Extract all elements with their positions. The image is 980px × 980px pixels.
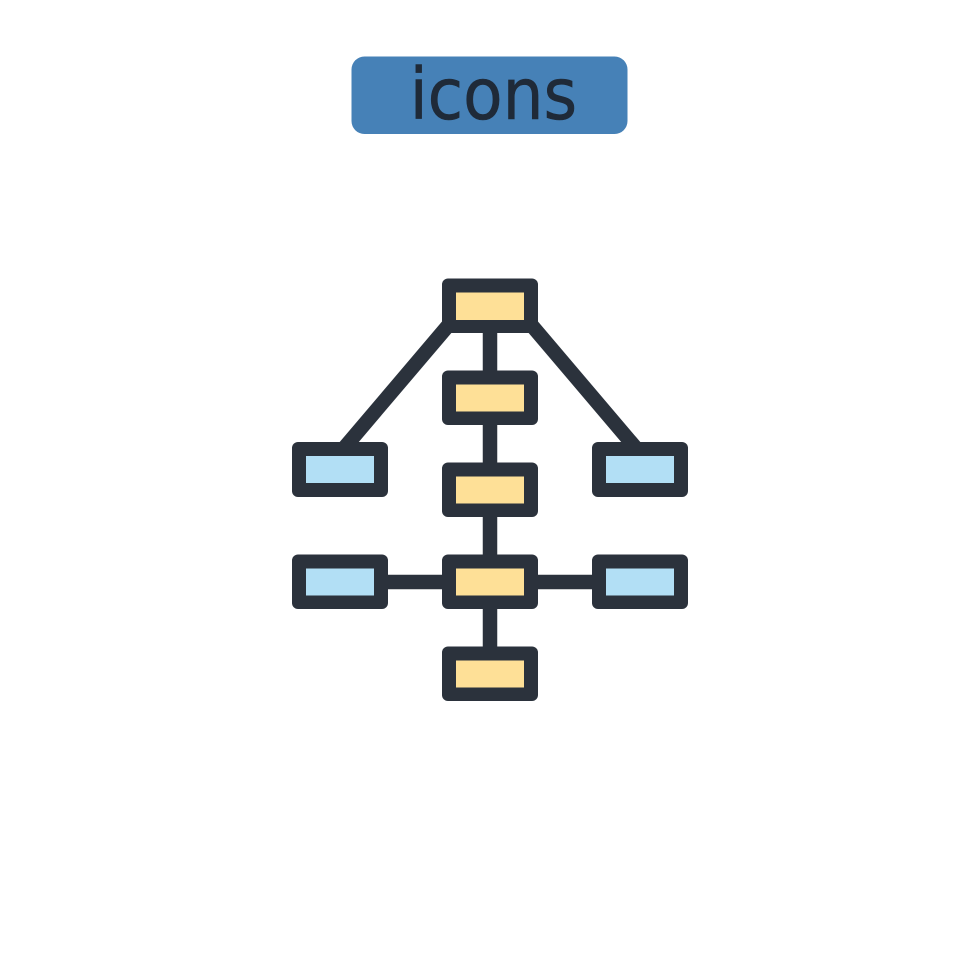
badge: icons label bbox=[352, 53, 628, 136]
node: centre 3 bbox=[442, 462, 538, 517]
node: upper left bbox=[292, 442, 388, 497]
node: upper right bbox=[592, 442, 688, 497]
node: lower left bbox=[292, 554, 388, 609]
connectors bbox=[343, 320, 637, 660]
node: lower right bbox=[592, 554, 688, 609]
badge text: icons bbox=[410, 53, 577, 136]
node: bottom bbox=[442, 646, 538, 701]
node: centre 4 bbox=[442, 554, 538, 609]
node: top bbox=[442, 278, 538, 333]
node: centre 2 bbox=[442, 370, 538, 425]
icon: hierarchy flowchart bbox=[292, 278, 688, 701]
